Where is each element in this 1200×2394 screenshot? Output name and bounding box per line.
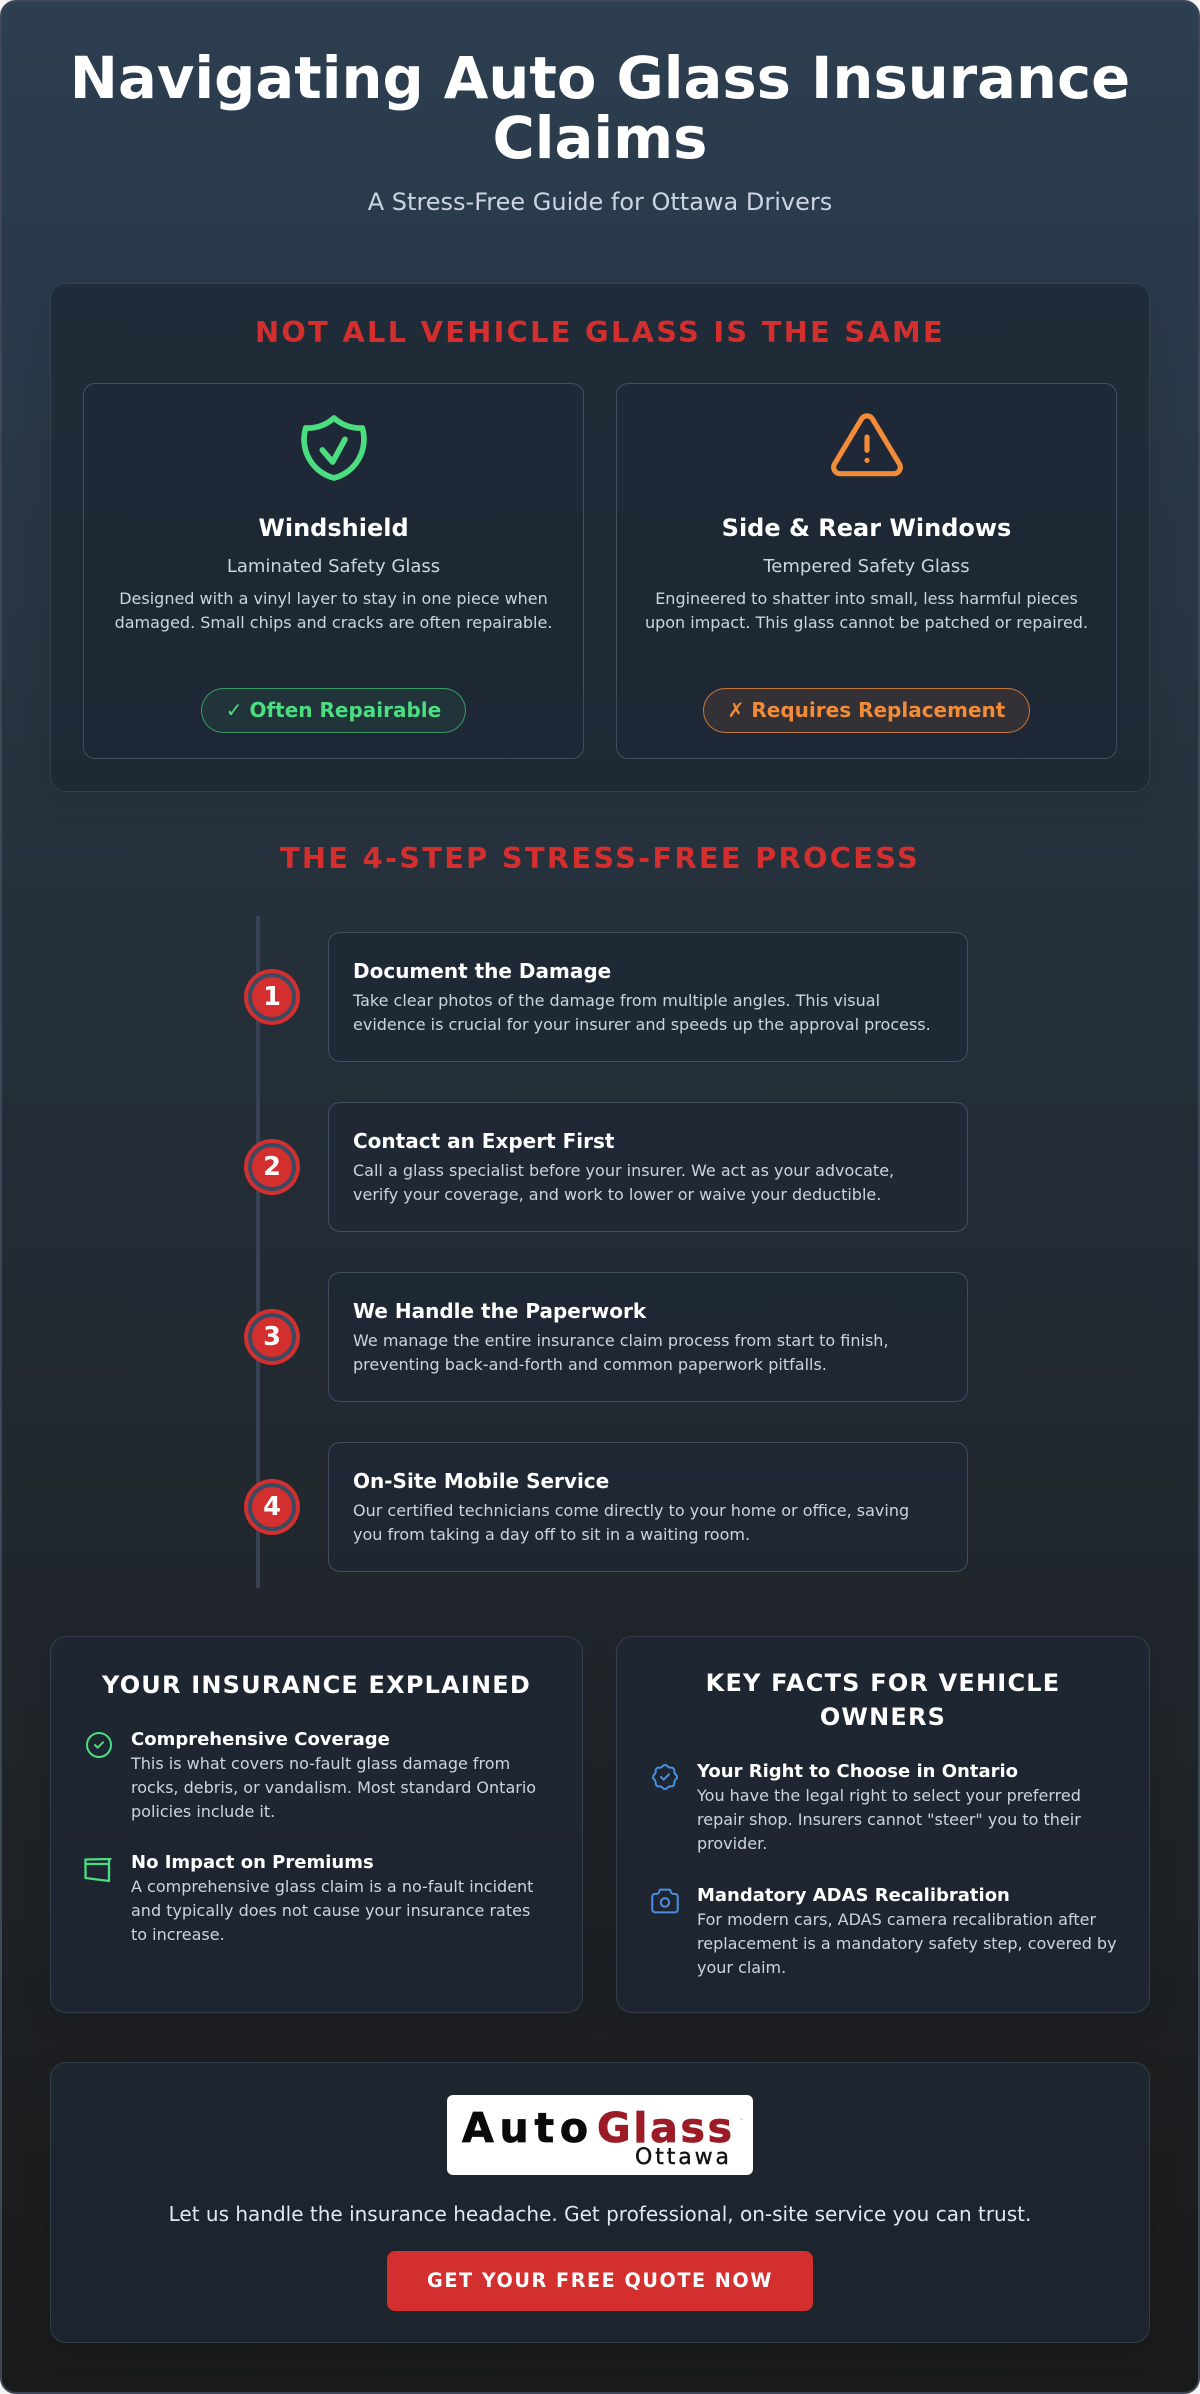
badge: often repairable: ✓ Often Repairable	[226, 698, 441, 722]
icon: camera	[651, 1888, 679, 1914]
card: contact an expert first: Contact an Expert First	[353, 1129, 614, 1153]
card: on-site mobile service: On-Site Mobile Service	[353, 1469, 609, 1493]
subtitle: A Stress-Free Guide for Ottawa Drivers	[368, 188, 832, 216]
step number 2: 2	[263, 1152, 281, 1182]
title: Navigating Auto Glass Insurance	[70, 45, 1130, 112]
item title: comprehensive coverage: Comprehensive Coverage	[131, 1729, 390, 1750]
item text: your right to choose	[697, 1786, 1081, 1853]
button: get your free quote now	[387, 2251, 813, 2311]
badge: requires replacement	[703, 688, 1030, 733]
card: we handle the paperwork: We manage the entire insurance claim process from start to finish,	[353, 1331, 889, 1350]
icon: shield check	[301, 415, 367, 481]
panel: key facts for vehicle owners	[616, 1636, 1150, 2013]
step 1	[244, 932, 968, 1062]
item text: mandatory adas recalibration: For modern cars, ADAS camera recalibration after	[697, 1910, 1096, 1929]
item text: no impact on premiums: A comprehensive glass claim is a no-fault incident	[131, 1877, 533, 1896]
card: contact an expert first: verify your coverage, and work to lower or waive your deductible.	[353, 1185, 881, 1204]
icon: premium box	[84, 1858, 112, 1882]
badge: often repairable	[201, 688, 466, 733]
step number 3: 3	[263, 1322, 281, 1352]
timeline line	[256, 916, 260, 1588]
heading: key facts for vehicle owners: KEY FACTS FOR VEHICLE	[706, 1669, 1060, 1697]
logo: auto glass ottawa	[447, 2095, 753, 2175]
card: document the damage: Take clear photos of the damage from multiple angles. This visual	[353, 991, 880, 1010]
heading: key facts for vehicle owners: OWNERS	[820, 1703, 946, 1731]
text: side and rear description: Engineered to shatter into small, less harmful pieces	[655, 589, 1078, 608]
item title: no impact on premiums: No Impact on Premiums	[131, 1852, 374, 1873]
title: Claims	[493, 105, 707, 172]
card: document the damage	[328, 932, 968, 1062]
item text: mandatory adas recalibration: your claim.	[697, 1958, 786, 1977]
card: contact an expert first: Call a glass specialist before your insurer. We act as your advocate,	[353, 1161, 894, 1180]
heading: not all vehicle glass is the same: NOT ALL VEHICLE GLASS IS THE SAME	[255, 315, 945, 349]
panel: your insurance explained	[50, 1636, 583, 2013]
card: side and rear windows	[616, 383, 1117, 759]
heading: your insurance explained: YOUR INSURANCE EXPLAINED	[102, 1671, 531, 1699]
panel: call to action	[50, 2062, 1150, 2343]
item text: mandatory adas recalibration: replacement is a mandatory safety step, covered by	[697, 1934, 1117, 1953]
item text: no impact on premiums: and typically does not cause your insurance rates	[131, 1901, 530, 1920]
text: side and rear description	[645, 589, 1088, 632]
card: we handle the paperwork	[328, 1272, 968, 1402]
step number 1: 1	[263, 982, 281, 1012]
card: windshield	[83, 383, 584, 759]
step number 3	[244, 1309, 300, 1365]
card: document the damage: evidence is crucial for your insurer and speeds up the approval process.	[353, 1015, 931, 1034]
heading: windshield: Windshield	[258, 514, 409, 542]
card: on-site mobile service	[328, 1442, 968, 1572]
step number 4: 4	[263, 1492, 281, 1522]
item text: comprehensive coverage: This is what covers no-fault glass damage from	[131, 1754, 510, 1773]
heading: side and rear windows: Side & Rear Windows	[722, 514, 1011, 542]
card: we handle the paperwork: preventing back-and-forth and common paperwork pitfalls.	[353, 1355, 827, 1374]
step number 1	[244, 969, 300, 1025]
card: document the damage: Document the Damage	[353, 959, 611, 983]
logo: auto glass ottawa: Ottawa	[635, 2145, 729, 2170]
item text: comprehensive coverage	[130, 1754, 536, 1821]
text: windshield description	[115, 589, 552, 632]
heading: 4-step process: THE 4-STEP STRESS-FREE PROCESS	[280, 841, 920, 875]
card: we handle the paperwork: We Handle the Paperwork	[353, 1299, 646, 1323]
badge: requires replacement: ✗ Requires Replacement	[728, 698, 1005, 722]
item text: comprehensive coverage: rocks, debris, or vandalism. Most standard Ontario	[131, 1778, 536, 1797]
item text: mandatory adas recalibration	[697, 1910, 1117, 1977]
item text: no impact on premiums: to increase.	[131, 1925, 225, 1944]
button: get your free quote now: GET YOUR FREE QUOTE NOW	[427, 2269, 773, 2292]
text: call to action message: Let us handle the insurance headache. Get professional, on-site service you can trust.	[169, 2202, 1031, 2226]
heading: key facts for vehicle owners	[706, 1669, 1060, 1731]
item text: comprehensive coverage: policies include it.	[131, 1802, 275, 1821]
card: on-site mobile service: you from taking a day off to sit in a waiting room.	[353, 1525, 750, 1544]
logo: auto glass ottawa: Glass	[597, 2104, 732, 2152]
item text: no impact on premiums	[131, 1877, 533, 1944]
text: side and rear description: upon impact. This glass cannot be patched or repaired.	[645, 613, 1088, 632]
subheading: laminated safety glass: Laminated Safety Glass	[227, 556, 440, 577]
panel: glass types	[50, 283, 1150, 792]
logo: auto glass ottawa: ™	[739, 2118, 744, 2124]
text: windshield description: Designed with a vinyl layer to stay in one piece when	[119, 589, 548, 608]
step 3	[244, 1272, 968, 1402]
icon: warning triangle	[831, 413, 903, 476]
text: windshield description: damaged. Small chips and cracks are often repairable.	[115, 613, 552, 632]
step 4	[244, 1442, 968, 1572]
card: on-site mobile service: Our certified technicians come directly to your home or office, saving	[353, 1501, 909, 1520]
item text: your right to choose: You have the legal right to select your preferred	[697, 1786, 1081, 1805]
card: contact an expert first	[328, 1102, 968, 1232]
step 2	[244, 1102, 968, 1232]
icon: circle check	[86, 1732, 112, 1758]
item text: your right to choose: provider.	[697, 1834, 767, 1853]
title	[70, 45, 1130, 172]
item title: mandatory adas recalibration: Mandatory ADAS Recalibration	[697, 1885, 1010, 1906]
subheading: tempered safety glass: Tempered Safety Glass	[763, 556, 970, 577]
logo: auto glass ottawa: Auto	[462, 2104, 588, 2152]
item title: your right to choose: Your Right to Choose in Ontario	[697, 1761, 1018, 1782]
step number 4	[244, 1479, 300, 1535]
step number 2	[244, 1139, 300, 1195]
item text: your right to choose: repair shop. Insurers cannot "steer" you to their	[697, 1810, 1081, 1829]
icon: rosette check	[652, 1764, 678, 1790]
